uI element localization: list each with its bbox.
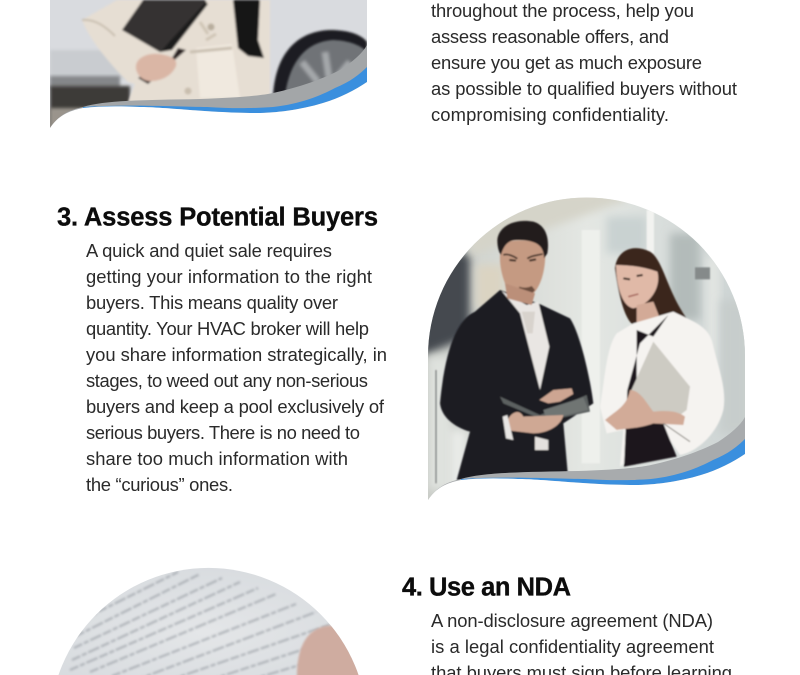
- text: step 4 body: [431, 610, 732, 675]
- text: step 2 continued: throughout the process, help you: [431, 0, 694, 21]
- wave: gray and blue swoosh: [50, 45, 367, 130]
- text: step 3 body: quantity. Your HVAC broker will help: [86, 318, 369, 339]
- text: step 3 body: you share information strategically, in: [86, 344, 387, 365]
- text: step 3 body: A quick and quiet sale requires: [86, 240, 332, 261]
- text: step 2 continued: ensure you get as much exposure: [431, 52, 702, 73]
- panel: dome photo of two business people: [420, 190, 750, 510]
- heading: 3. Assess Potential Buyers: 3. Assess Potential Buyers: [57, 204, 378, 232]
- finger: [297, 626, 365, 675]
- woman in trench coat with folder: [82, 0, 270, 102]
- panel: circular photo of document with finger: [58, 568, 358, 675]
- text: step 2 continued: compromising confidentiality.: [431, 104, 669, 125]
- text: step 2 continued: [431, 0, 737, 125]
- photo: paper with printed lines: [58, 568, 358, 675]
- text: step 2 continued: assess reasonable offers, and: [431, 26, 669, 47]
- text: step 4 body: A non-disclosure agreement (NDA): [431, 610, 713, 631]
- text: step 3 body: share too much information with: [86, 448, 348, 469]
- text: step 3 body: the “curious” ones.: [86, 474, 233, 495]
- man in black suit with notebook: [440, 221, 593, 480]
- text: step 2 continued: as possible to qualified buyers without: [431, 78, 737, 99]
- text: step 3 body: stages, to weed out any non-serious: [86, 370, 368, 391]
- photo: hallway background: [420, 190, 750, 510]
- text: step 3 body: getting your information to the right: [86, 266, 372, 287]
- text: step 3 body: buyers and keep a pool exclusively of: [86, 396, 385, 417]
- text: step 3 body: serious buyers. There is no need to: [86, 422, 360, 443]
- text: step 3 body: [86, 240, 387, 495]
- panel: top-left photo of woman by car: [50, 0, 367, 130]
- text: step 3 body: buyers. This means quality over: [86, 292, 338, 313]
- photo background: car: [50, 0, 367, 130]
- wave: gray and blue swoosh: [428, 417, 745, 502]
- heading: 4. Use an NDA: 4. Use an NDA: [402, 574, 571, 602]
- text: step 4 body: is a legal confidentiality agreement: [431, 636, 714, 657]
- woman in white blazer with laptop: [600, 248, 724, 467]
